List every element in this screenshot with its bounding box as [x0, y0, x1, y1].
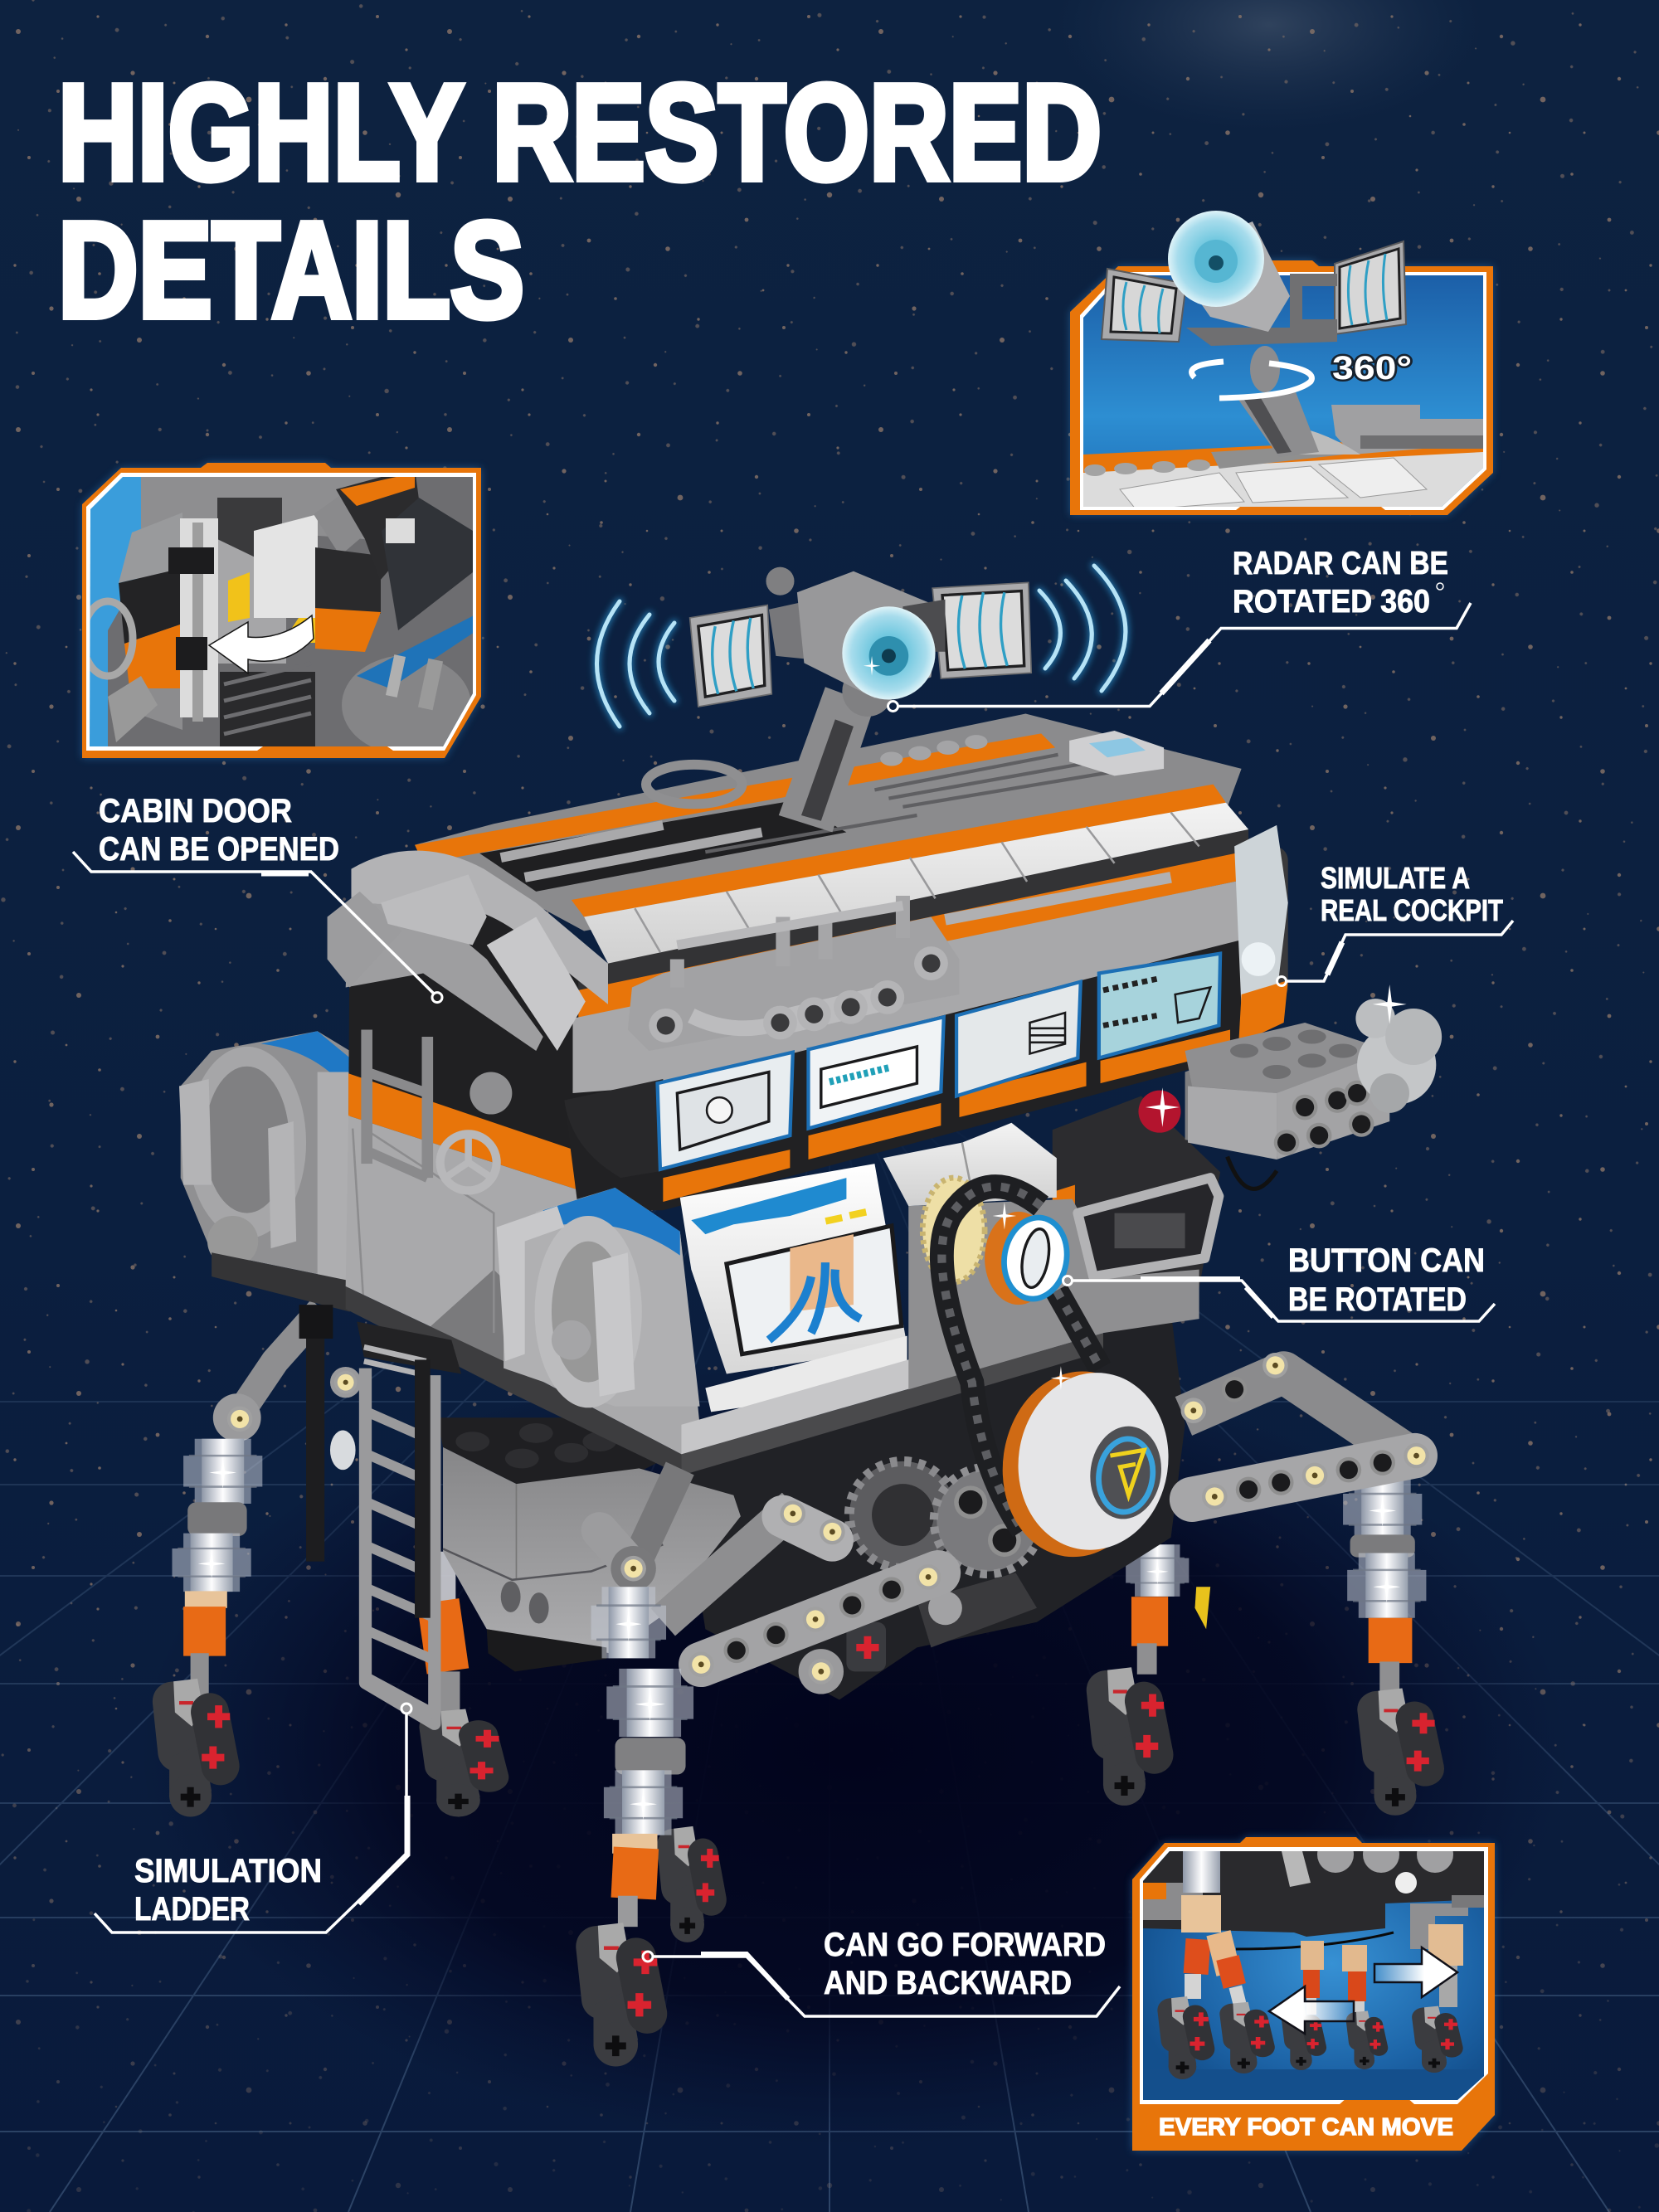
big wheel: [990, 1362, 1180, 1567]
ladder: [299, 1305, 461, 1723]
callout: ladder: [95, 1704, 411, 1932]
radar inset: body: [1168, 221, 1337, 392]
title: [58, 56, 1102, 346]
callout: button: BUTTON CAN: [1288, 1242, 1485, 1279]
cabin side wall and door face: [346, 860, 1103, 1475]
radar inset: left panel: [1102, 269, 1186, 342]
grey brick blaster: [1185, 984, 1442, 1189]
chain drive: [941, 1187, 1101, 1530]
radar inset: right panel: [1335, 241, 1406, 334]
feet inset: caption: EVERY FOOT CAN MOVE: [1159, 2114, 1453, 2141]
right front blocks and dark hull: [883, 1096, 1220, 1389]
inset: cabin door detail: [82, 463, 481, 758]
feet inset: move left arrow: [1269, 1986, 1354, 2034]
callout: cockpit: SIMULATE A: [1321, 861, 1470, 895]
callout: radar: [888, 546, 1471, 712]
rotating button: [985, 1202, 1077, 1307]
title: HIGHLY RESTORED: [58, 56, 1102, 208]
title: DETAILS: [58, 194, 524, 346]
door inset: machinery picture: [90, 477, 473, 746]
callout: ladder: SIMULATION: [134, 1853, 322, 1889]
radar left panel: [690, 605, 771, 707]
sound arcs: left: [597, 601, 674, 727]
robot model: [151, 567, 1447, 2067]
cabin body: [564, 825, 1288, 1210]
radar lens: [842, 606, 936, 700]
front leg: [574, 1587, 693, 2067]
front beams: [600, 1468, 941, 1694]
radar body: [766, 567, 945, 698]
rear left leg: [151, 1309, 322, 1817]
rear ladder-side leg: [417, 1552, 512, 1817]
inset: radar rotation detail: [1070, 211, 1493, 515]
callout: radar: RADAR CAN BE: [1233, 546, 1448, 581]
background: perspective grid floor: [0, 1205, 1659, 2212]
rear right leg: [1084, 1544, 1210, 1806]
radar inset: stand: [1237, 390, 1319, 457]
door inset: open arrow: [209, 615, 314, 673]
callout: button: [1063, 1242, 1495, 1321]
right leg: [1343, 1477, 1447, 1816]
background: dark floor shadow: [141, 1352, 1568, 2148]
front second foot: [655, 1826, 729, 1942]
callout: cockpit: [1277, 861, 1513, 985]
red warning light: [1138, 1087, 1180, 1133]
gold gear: [922, 1178, 985, 1282]
underbelly machinery: [677, 1312, 1185, 1699]
callout: cabin door: CAN BE OPENED: [99, 831, 339, 868]
background: nebula: [1053, 0, 1485, 133]
cabin windows: [658, 954, 1220, 1169]
callout: radar: ROTATED 360: [1233, 584, 1430, 620]
radar stand: [779, 687, 874, 832]
callout: cabin door: [73, 793, 442, 1003]
sound arcs: right: [1039, 566, 1126, 691]
inset: every foot can move: [1132, 1836, 1495, 2151]
left rear machine unit: [179, 1031, 350, 1312]
feet inset: legs: [1156, 1851, 1465, 2079]
radar inset: 360 label: 360°: [1332, 350, 1412, 386]
lower left block and disc: [497, 1188, 700, 1407]
callout: forward and backward: AND BACKWARD: [824, 1965, 1072, 2001]
roof: [328, 714, 1248, 1051]
callout: ladder: LADDER: [134, 1891, 250, 1928]
radar inset: lens: [1168, 211, 1264, 307]
grey box: [437, 1417, 741, 1671]
capsule: [680, 1164, 1103, 1454]
callout: forward and backward: [643, 1927, 1120, 2016]
roof tool pipes and ledge: [628, 878, 1171, 1051]
radar right panel: [932, 582, 1031, 678]
callout: cockpit: REAL COCKPIT: [1321, 893, 1503, 927]
radar inset: blue panel and roof: [1078, 270, 1489, 514]
callout: cabin door: CABIN DOOR: [99, 793, 292, 829]
radar: [690, 567, 1031, 832]
feet inset: move right arrow: [1374, 1947, 1457, 1997]
callout: button: BE ROTATED: [1288, 1281, 1467, 1318]
radar inset: rotation arrow: [1192, 362, 1311, 398]
callout: forward and backward: CAN GO FORWARD: [824, 1927, 1106, 1963]
right beams: [1180, 1353, 1429, 1510]
feet inset: picture: [1141, 1836, 1489, 2105]
